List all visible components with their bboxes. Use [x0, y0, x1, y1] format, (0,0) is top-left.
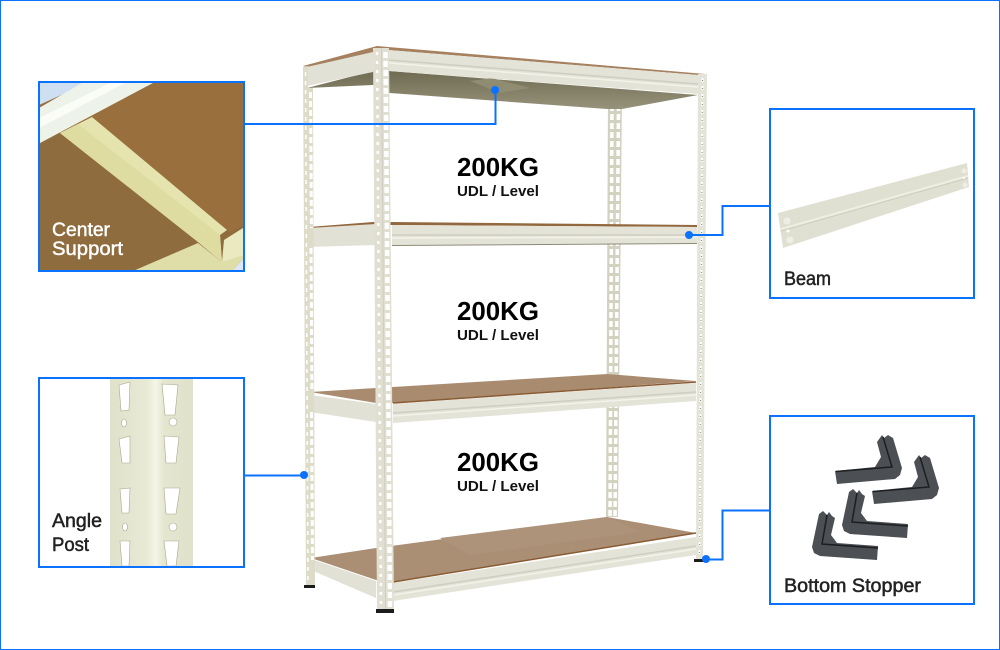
right post	[696, 74, 707, 560]
second shelf	[309, 222, 697, 247]
load label: middle level	[457, 296, 539, 344]
label: beam: Beam	[784, 269, 831, 290]
connector: bottom stopper	[702, 510, 770, 563]
load label: lower level: UDL / Level	[457, 478, 539, 495]
label: angle post: Post	[52, 535, 90, 556]
panel: center support	[39, 82, 244, 271]
label: center support	[52, 220, 124, 260]
label: bottom stopper: Bottom Stopper	[784, 576, 922, 597]
connector: beam	[685, 206, 770, 239]
front post	[373, 48, 394, 609]
connector: center support	[244, 86, 499, 124]
label: center support: Support	[52, 239, 124, 260]
load label: middle level: UDL / Level	[457, 327, 539, 344]
back post	[606, 95, 622, 517]
connector: angle post	[244, 471, 308, 479]
load label: middle level: 200KG	[457, 296, 539, 326]
label: center support: Center	[52, 220, 111, 241]
left post	[303, 66, 315, 585]
third shelf	[310, 374, 696, 423]
load label: lower level	[457, 447, 539, 495]
load label: top level: 200KG	[457, 152, 539, 182]
shelving rack	[303, 46, 707, 613]
panel: beam	[770, 109, 974, 298]
load label: top level	[457, 152, 539, 200]
load label: lower level: 200KG	[457, 447, 539, 477]
panel: bottom stopper	[770, 416, 974, 604]
feet	[304, 559, 704, 613]
load label: top level: UDL / Level	[457, 183, 539, 200]
top shelf	[303, 46, 705, 109]
stopper parts	[812, 435, 939, 560]
beam image	[778, 163, 969, 248]
label: angle post: Angle	[52, 511, 102, 532]
bottom shelf	[311, 517, 696, 601]
label: angle post	[52, 511, 102, 556]
panel: angle post	[39, 378, 244, 567]
